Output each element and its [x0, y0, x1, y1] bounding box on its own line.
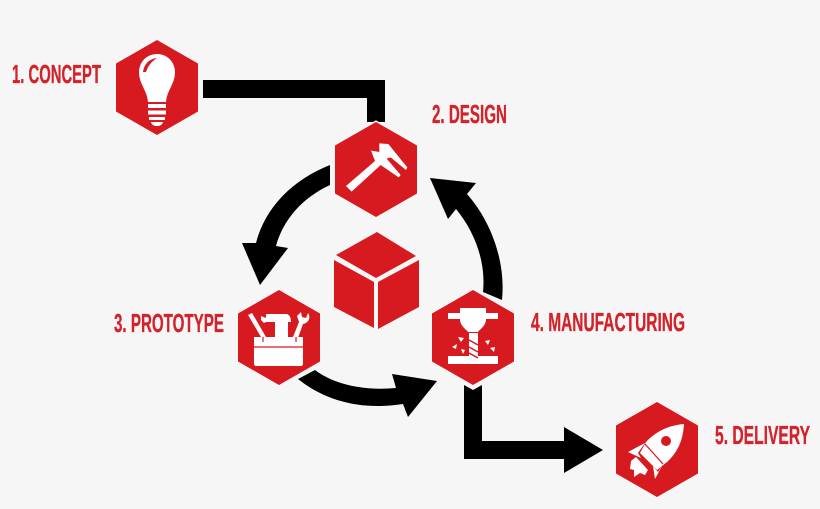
hexagon: delivery — [616, 402, 698, 497]
icon: milling machine — [448, 308, 498, 364]
label: design: 2. DESIGN — [432, 99, 507, 129]
step 3: prototype — [114, 290, 320, 385]
icon: light bulb — [139, 54, 175, 126]
icon: rocket — [628, 424, 684, 479]
label: prototype: 3. PROTOTYPE — [114, 308, 224, 338]
hexagon: concept — [116, 40, 198, 135]
label: manufacturing: 4. MANUFACTURING — [531, 307, 685, 337]
icon: toolbox — [248, 312, 309, 366]
arrow: manufacturing to design — [430, 178, 503, 300]
icon: caliper — [346, 143, 407, 192]
step 2: design — [335, 99, 507, 217]
arrow: design to prototype — [242, 165, 330, 285]
label: concept: 1. CONCEPT — [12, 59, 101, 89]
hexagon: design — [335, 122, 417, 217]
arrow: prototype to manufacturing — [298, 370, 437, 417]
arrow: concept to design — [203, 80, 385, 122]
icon: central cube — [334, 232, 419, 329]
arrow: manufacturing to delivery — [464, 385, 603, 473]
step 1: concept — [12, 40, 198, 135]
step 4: manufacturing — [432, 290, 685, 385]
hexagon: manufacturing — [432, 290, 514, 385]
step 5: delivery — [616, 402, 810, 497]
hexagon: prototype — [238, 290, 320, 385]
